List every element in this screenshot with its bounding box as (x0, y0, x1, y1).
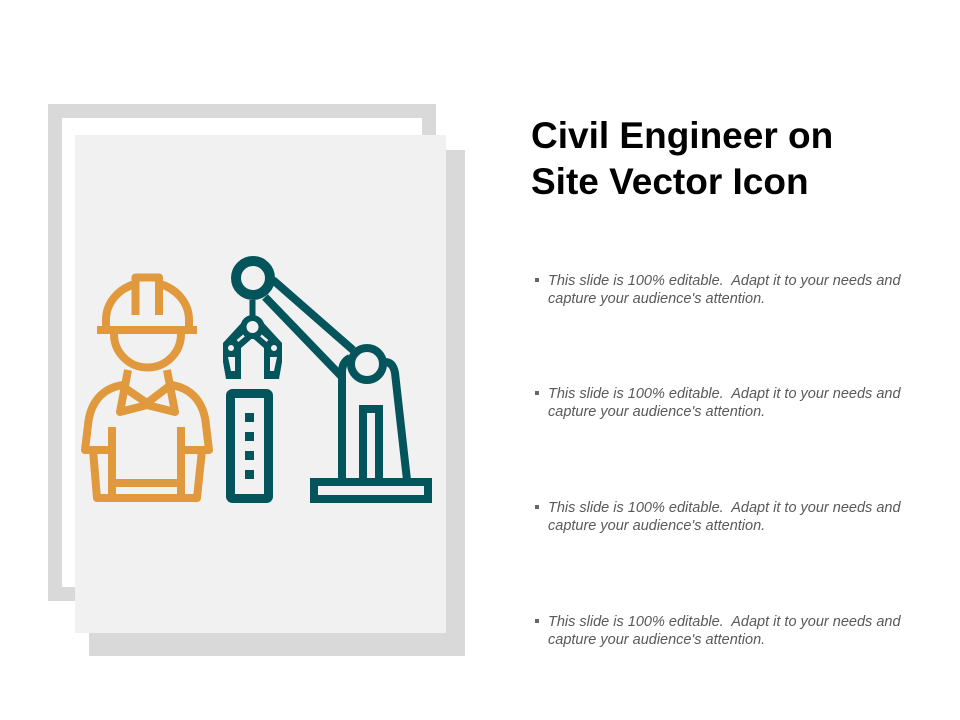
panel: front light gray card (75, 135, 446, 633)
text block: bullet 4: This slide is 100% editable. Adapt it to your needs and capture your audience's attention. (548, 614, 901, 648)
title (531, 115, 833, 202)
title: Site Vector Icon (531, 161, 809, 202)
text block: bullet 2: This slide is 100% editable. Adapt it to your needs and capture your audience's attention. (548, 386, 901, 420)
icon: engineer with hard hat (85, 278, 209, 498)
text block: bullet 1: This slide is 100% editable. Adapt it to your needs and capture your audience's attention. (548, 273, 901, 307)
title: Civil Engineer on (531, 115, 833, 156)
icon: robotic crane arm (223, 261, 428, 499)
panel: drop shadow block (89, 150, 465, 656)
panel: back frame, gray with white inset (48, 104, 436, 601)
icon: building block with dots (230, 394, 268, 498)
icon: claw gripper (223, 300, 282, 379)
text block: bullet 3: This slide is 100% editable. Adapt it to your needs and capture your audience's attention. (548, 500, 901, 534)
